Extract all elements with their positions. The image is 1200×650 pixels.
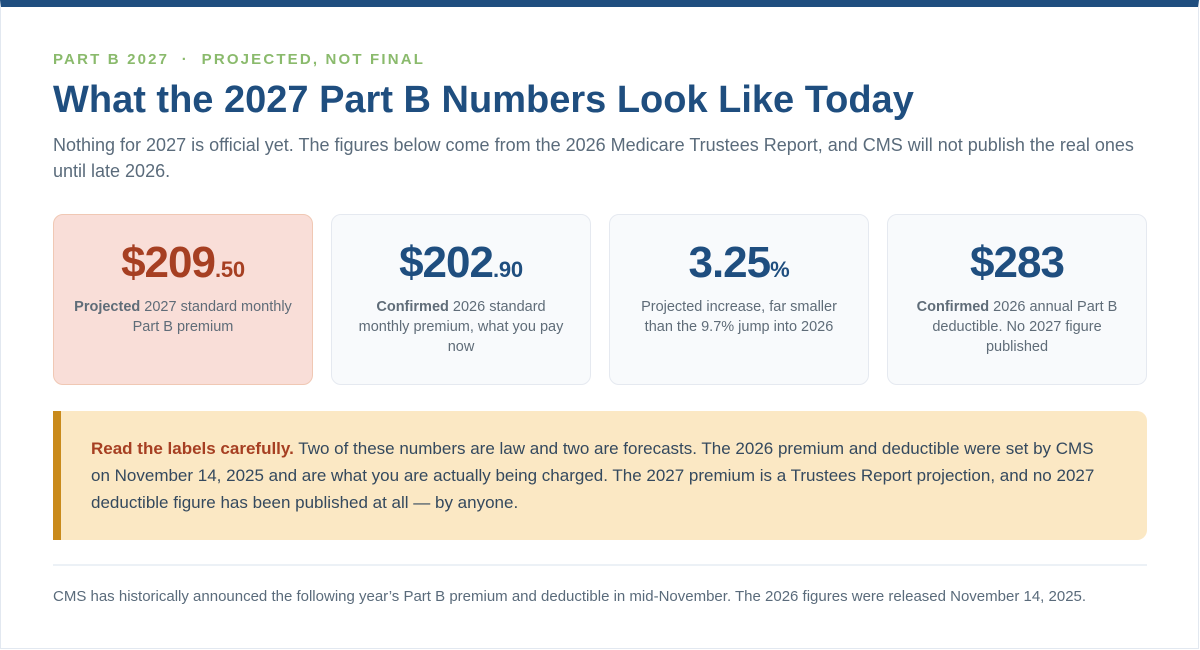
card: confirmed deductible	[887, 214, 1147, 385]
eyebrow label: PART B 2027 · PROJECTED, NOT FINAL	[53, 51, 425, 68]
card: projected increase	[609, 214, 869, 385]
value: $202.90: $202.90	[399, 238, 523, 287]
value: $209.50: $209.50	[121, 238, 245, 287]
caption: confirmed deductible: Confirmed 2026 annual Part B deductible. No 2027 figure published	[917, 299, 1117, 355]
caption: projected increase: Projected increase, far smaller than the 9.7% jump into 2026	[641, 299, 837, 335]
card: projected 2027 premium	[53, 214, 313, 385]
value: $283: $283	[970, 238, 1064, 287]
caption: projected premium: Projected 2027 standard monthly Part B premium	[74, 299, 292, 335]
callout: read the labels carefully: Read the labels carefully. Two of these numbers are law and two are forecasts. The 2026 premium and deductible were set by CMS on November 14, 2025 and are what you are actually being charged. The 2027 premium is a Trustees Report projection, and no 2027 deductible figure has been published at all — by anyone.	[91, 439, 1094, 512]
caption: confirmed premium: Confirmed 2026 standard monthly premium, what you pay now	[359, 299, 563, 355]
card: confirmed 2026 premium	[331, 214, 591, 385]
value: 3.25%: 3.25%	[688, 238, 790, 287]
title: What the 2027 Part B Numbers Look Like Today	[53, 79, 914, 121]
callout: read the labels carefully	[53, 411, 1147, 540]
footer note: CMS has historically announced the following year’s Part B premium and deductible in mid-November. The 2026 figures were released November 14, 2025.	[53, 588, 1086, 605]
subtitle: Nothing for 2027 is official yet. The figures below come from the 2026 Medicare Trustees Report, and CMS will not publish the real ones until late 2026.	[53, 135, 1134, 181]
